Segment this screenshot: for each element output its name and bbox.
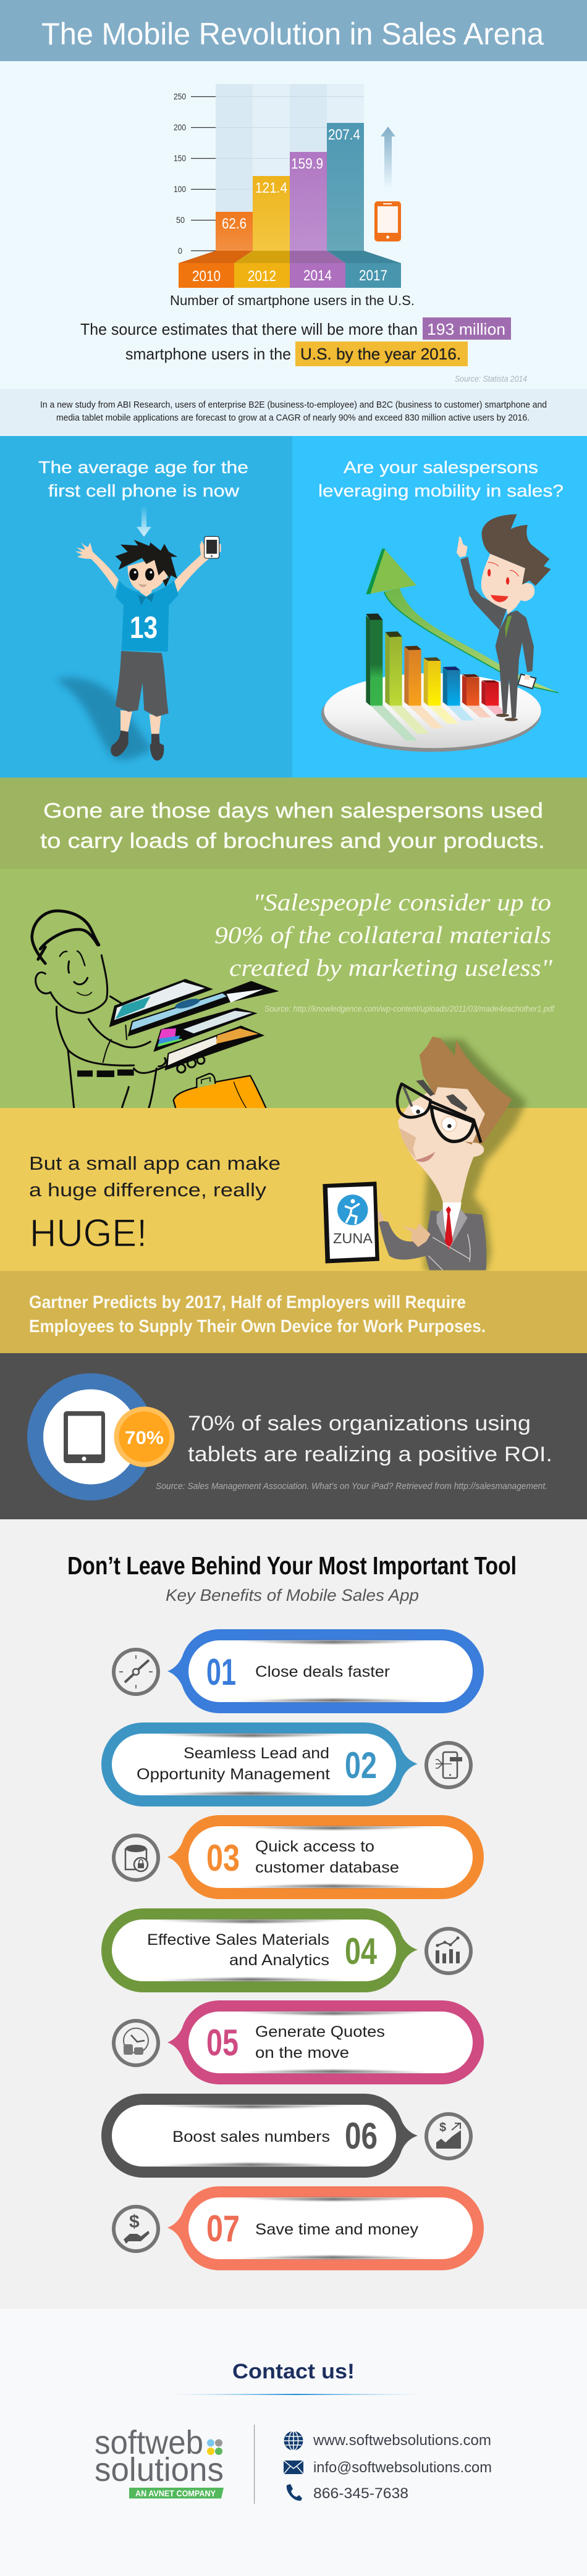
benefit 02: Seamless Lead and [184, 1745, 329, 1762]
banner: Gartner prediction [0, 1271, 587, 1353]
benefit 07 [114, 2186, 484, 2270]
ZUNA logo [333, 1194, 373, 1246]
icon: money in hand [114, 2207, 158, 2251]
panel: quote on collateral materials [0, 869, 587, 1110]
gradient rule [171, 2394, 421, 2395]
title banner: The Mobile Revolution in Sales Arena [41, 17, 544, 51]
heading: Are your salespersons [344, 458, 538, 477]
heading: The average age for the [38, 458, 248, 477]
jersey number: 13 [130, 610, 158, 645]
benefit 05: on the move [255, 2044, 349, 2062]
benefit 06: Boost sales numbers [172, 2128, 330, 2146]
text [29, 1152, 281, 1255]
arrow pointing down [137, 506, 151, 537]
benefit 01: 01 [206, 1651, 236, 1693]
logo: softweb solutions: solutions [95, 2451, 224, 2488]
bar chart: smartphone users: 62.6 [222, 216, 247, 232]
text: HUGE! [30, 1212, 147, 1255]
benefit 04: 04 [345, 1931, 377, 1972]
icon: phone network [426, 1743, 471, 1787]
benefit 01 [114, 1629, 484, 1713]
logo: softweb solutions [95, 2424, 224, 2499]
heading [38, 458, 248, 500]
title banner [0, 0, 587, 61]
benefit 03: 03 [206, 1837, 240, 1879]
quote: 90% of the collateral materials [214, 922, 551, 949]
icon: database lock [114, 1836, 158, 1880]
heading: first cell phone is now [48, 481, 240, 500]
icon: analytics bars [426, 1929, 471, 1973]
illustration: businessman with growth chart [321, 514, 559, 752]
statement: tablets are realizing a positive ROI. [188, 1443, 552, 1466]
banner: gone are those days [0, 778, 587, 869]
panel: 70 percent positive ROI [0, 1353, 587, 1519]
contact: phone: 866-345-7638 [313, 2485, 408, 2502]
icon: smartphone [374, 201, 401, 241]
divider [254, 2425, 255, 2504]
bar chart: smartphone users: 2014 [303, 267, 332, 284]
source: Source: Sales Management Association. What’s on Your iPad? Retrieved from http://salesmanagement. [156, 1482, 547, 1491]
ABI research note band: media tablet mobile applications are forecast to grow at a CAGR of nearly 90% and exceed 830 million active users by 2016. [56, 413, 530, 423]
benefit 02 [101, 1722, 471, 1806]
benefit 06: 06 [345, 2115, 378, 2157]
icon: tablet in ring [27, 1374, 154, 1501]
text: But a small app can make [29, 1152, 281, 1174]
benefit 03: Quick access to [255, 1838, 374, 1855]
banner: gone are those days: to carry loads of brochures and your products. [40, 829, 545, 853]
bar chart: smartphone users: 250 [174, 91, 186, 101]
subheading: Key Benefits of Mobile Sales App [166, 1586, 419, 1605]
section: contact footer [95, 2360, 492, 2504]
icon: compass [114, 1650, 158, 1694]
benefit 05 [114, 2000, 484, 2084]
bar chart: smartphone users: 121.4 [255, 180, 287, 196]
icon: growth arrow [381, 127, 395, 189]
panel: average age for first cell phone [0, 436, 292, 778]
banner: gone are those days: Gone are those days when salespersons used [43, 799, 543, 823]
logo: softweb solutions: AN AVNET COMPANY [135, 2488, 216, 2498]
bar chart: smartphone users: 0 [178, 246, 182, 256]
benefit 05: Generate Quotes [255, 2023, 385, 2041]
quote [214, 889, 553, 981]
benefit 03: customer database [255, 1859, 399, 1876]
benefit 07: Save time and money [255, 2221, 419, 2238]
badge: 70%: 70% [125, 1428, 164, 1448]
quote: created by marketing useless" [229, 955, 553, 981]
heading: leveraging mobility in sales? [318, 481, 564, 500]
icon: sales growth: $ [439, 2121, 446, 2134]
benefit 06 [101, 2094, 471, 2178]
illustration: man with ZUNA tablet [323, 1036, 526, 1270]
heading [318, 458, 564, 500]
bar chart: smartphone users: 2012 [248, 268, 276, 285]
ABI research note band: In a new study from ABI Research, users of enterprise B2E (business-to-employee) and B2C (business to customer) smartphone and [40, 400, 547, 410]
logo: softweb solutions: softweb [95, 2424, 203, 2461]
benefit 05: 05 [206, 2022, 239, 2063]
estimate statement with highlights: smartphone users in the [125, 345, 291, 363]
illustration: boy holding phone [56, 537, 221, 761]
bar chart: smartphone users: 50 [176, 215, 185, 225]
badge: 70% [114, 1407, 174, 1467]
estimate statement with highlights: The source estimates that there will be more than [80, 320, 418, 338]
benefit 04 [101, 1908, 471, 1992]
bar chart: smartphone users: 100 [174, 184, 186, 194]
section: key benefits [0, 1519, 587, 2309]
source note: Source: Statista 2014 [455, 374, 527, 384]
ZUNA logo: ZUNA [333, 1230, 373, 1246]
quote: "Salespeople consider up to [253, 889, 551, 916]
banner: Gartner prediction: Gartner Predicts by 2017, Half of Employers will Require [29, 1293, 466, 1312]
panel: a small app can make a huge difference [0, 1036, 587, 1271]
contact: website: www.softwebsolutions.com [313, 2432, 491, 2449]
benefit 04: Effective Sales Materials [147, 1931, 329, 1949]
estimate statement with highlights [80, 317, 511, 366]
bar chart: smartphone users: 159.9 [291, 156, 323, 172]
bar chart: smartphone users [174, 84, 401, 288]
contact: email: info@softwebsolutions.com [313, 2459, 492, 2476]
bar chart: smartphone users: 2010 [192, 268, 221, 285]
bar chart: smartphone users: 150 [174, 153, 186, 163]
chart caption: Number of smartphone users in the U.S. [170, 293, 415, 308]
ABI research note band [0, 389, 587, 436]
icon: sales growth [426, 2114, 471, 2159]
section: smartphone users intro [0, 0, 587, 436]
benefit 02: Opportunity Management [137, 1766, 330, 1783]
bar chart: smartphone users: 200 [174, 122, 186, 132]
icon: money in hand: $ [129, 2212, 140, 2232]
statement [188, 1412, 552, 1466]
banner: Gartner prediction: Employees to Supply Their Own Device for Work Purposes. [29, 1317, 486, 1336]
benefit 04: and Analytics [229, 1952, 329, 1969]
statement: 70% of sales organizations using [188, 1412, 531, 1435]
bar chart: smartphone users: 207.4 [328, 127, 360, 143]
benefit 01: Close deals faster [255, 1663, 390, 1680]
estimate statement with highlights: 193 million [427, 320, 505, 338]
bar chart: smartphone users: 2017 [359, 267, 387, 284]
source: Source: http://knowledgence.com/wp-content/uploads/2011/03/made4eachother1.pdf [264, 1004, 555, 1013]
benefit 02: 02 [345, 1745, 377, 1786]
benefit 07: 07 [206, 2208, 240, 2249]
estimate statement with highlights: U.S. by the year 2016. [300, 345, 461, 363]
icon: clock and coins [114, 2021, 158, 2065]
panel: leveraging mobility [292, 436, 587, 778]
text: a huge difference, really [29, 1179, 267, 1201]
benefit 03 [114, 1815, 484, 1899]
heading: Contact us! [232, 2360, 355, 2383]
illustration: man with brochures and briefcase [32, 911, 279, 1110]
